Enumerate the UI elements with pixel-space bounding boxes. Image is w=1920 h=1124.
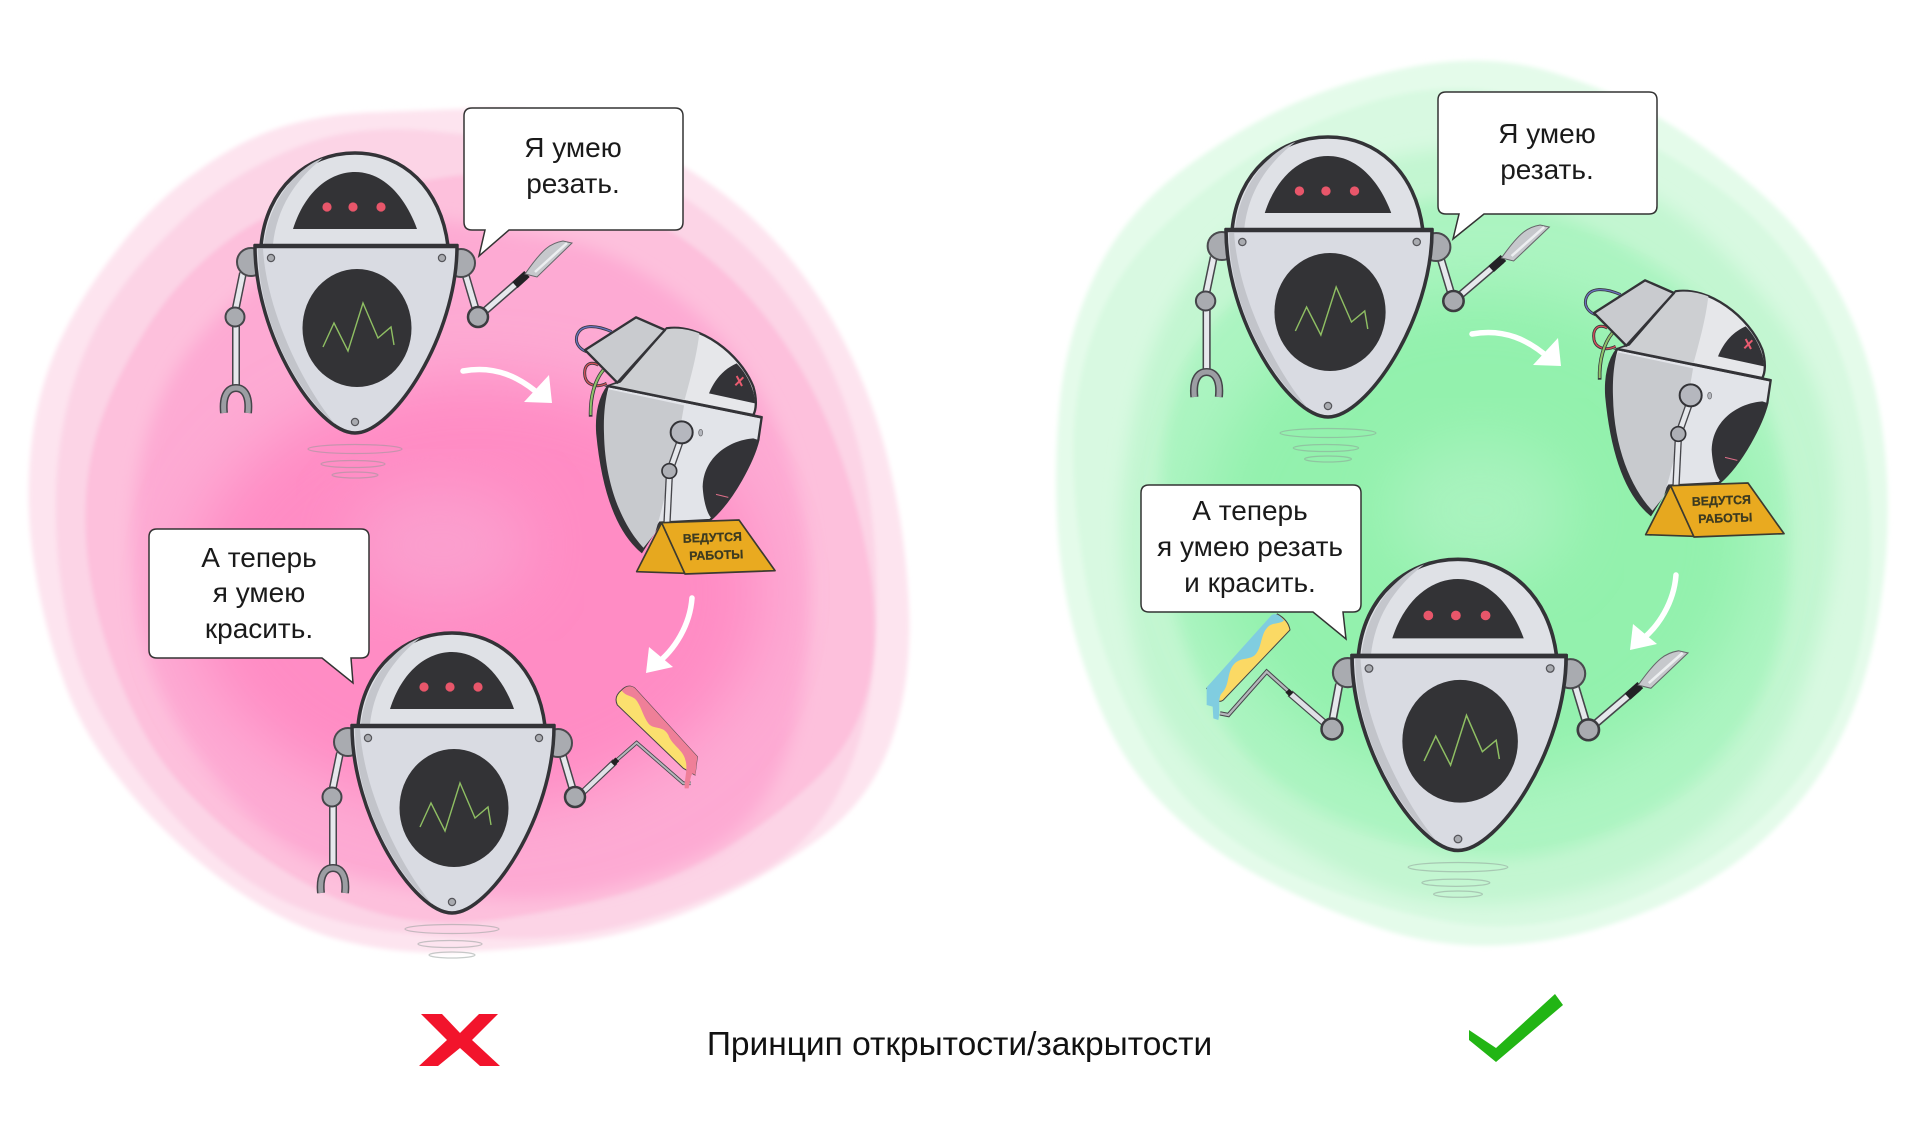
- green watercolor background: [1030, 43, 1917, 973]
- icon: pink paint roller: [580, 686, 697, 795]
- robot under repair: ВЕДУТСЯ: [1692, 493, 1751, 509]
- robot under repair: РАБОТЫ: [1698, 510, 1753, 526]
- arrow: to repair: [1472, 332, 1561, 366]
- speech bubble: can cut and paint: и красить.: [1184, 567, 1316, 598]
- speech bubble: can cut and paint: я умею резать: [1157, 531, 1343, 562]
- robot under repair: [1585, 280, 1784, 537]
- robot: can cut and paint: [1207, 559, 1688, 897]
- panel: wrong design (pink): [0, 82, 940, 993]
- arrow: to repair: [463, 369, 552, 403]
- speech bubble: can cut: резать.: [1500, 154, 1594, 185]
- robot under repair: ВЕДУТСЯ: [683, 530, 742, 546]
- speech bubble: can cut and paint: [1141, 485, 1361, 639]
- speech bubble: can cut: Я умею: [1498, 118, 1596, 149]
- speech bubble: can cut: резать.: [526, 168, 620, 199]
- speech bubble: can paint: [149, 529, 369, 683]
- robot under repair: РАБОТЫ: [689, 547, 744, 563]
- speech bubble: can paint: я умею: [213, 577, 305, 608]
- speech bubble: can cut and paint: А теперь: [1192, 495, 1308, 526]
- icon: blue paint roller: [1207, 614, 1332, 729]
- icon: green check mark: [1469, 994, 1563, 1062]
- arrow: from repair: [646, 598, 692, 673]
- speech bubble: can cut: [464, 108, 683, 256]
- icon: red cross: [419, 1014, 500, 1066]
- robot: can cut: [224, 153, 572, 478]
- speech bubble: can paint: А теперь: [201, 542, 317, 573]
- speech bubble: can cut: Я умею: [524, 132, 622, 163]
- pink watercolor background: [0, 82, 940, 993]
- panel: right design (green): [1030, 43, 1917, 973]
- arrow: from repair: [1630, 575, 1676, 650]
- robot: can paint: [321, 633, 697, 958]
- title: Принцип открытости/закрытости: [707, 1026, 1212, 1063]
- robot: can cut: [1194, 137, 1549, 462]
- robot under repair: [576, 317, 775, 574]
- speech bubble: can cut: [1438, 92, 1657, 239]
- speech bubble: can paint: красить.: [205, 613, 313, 644]
